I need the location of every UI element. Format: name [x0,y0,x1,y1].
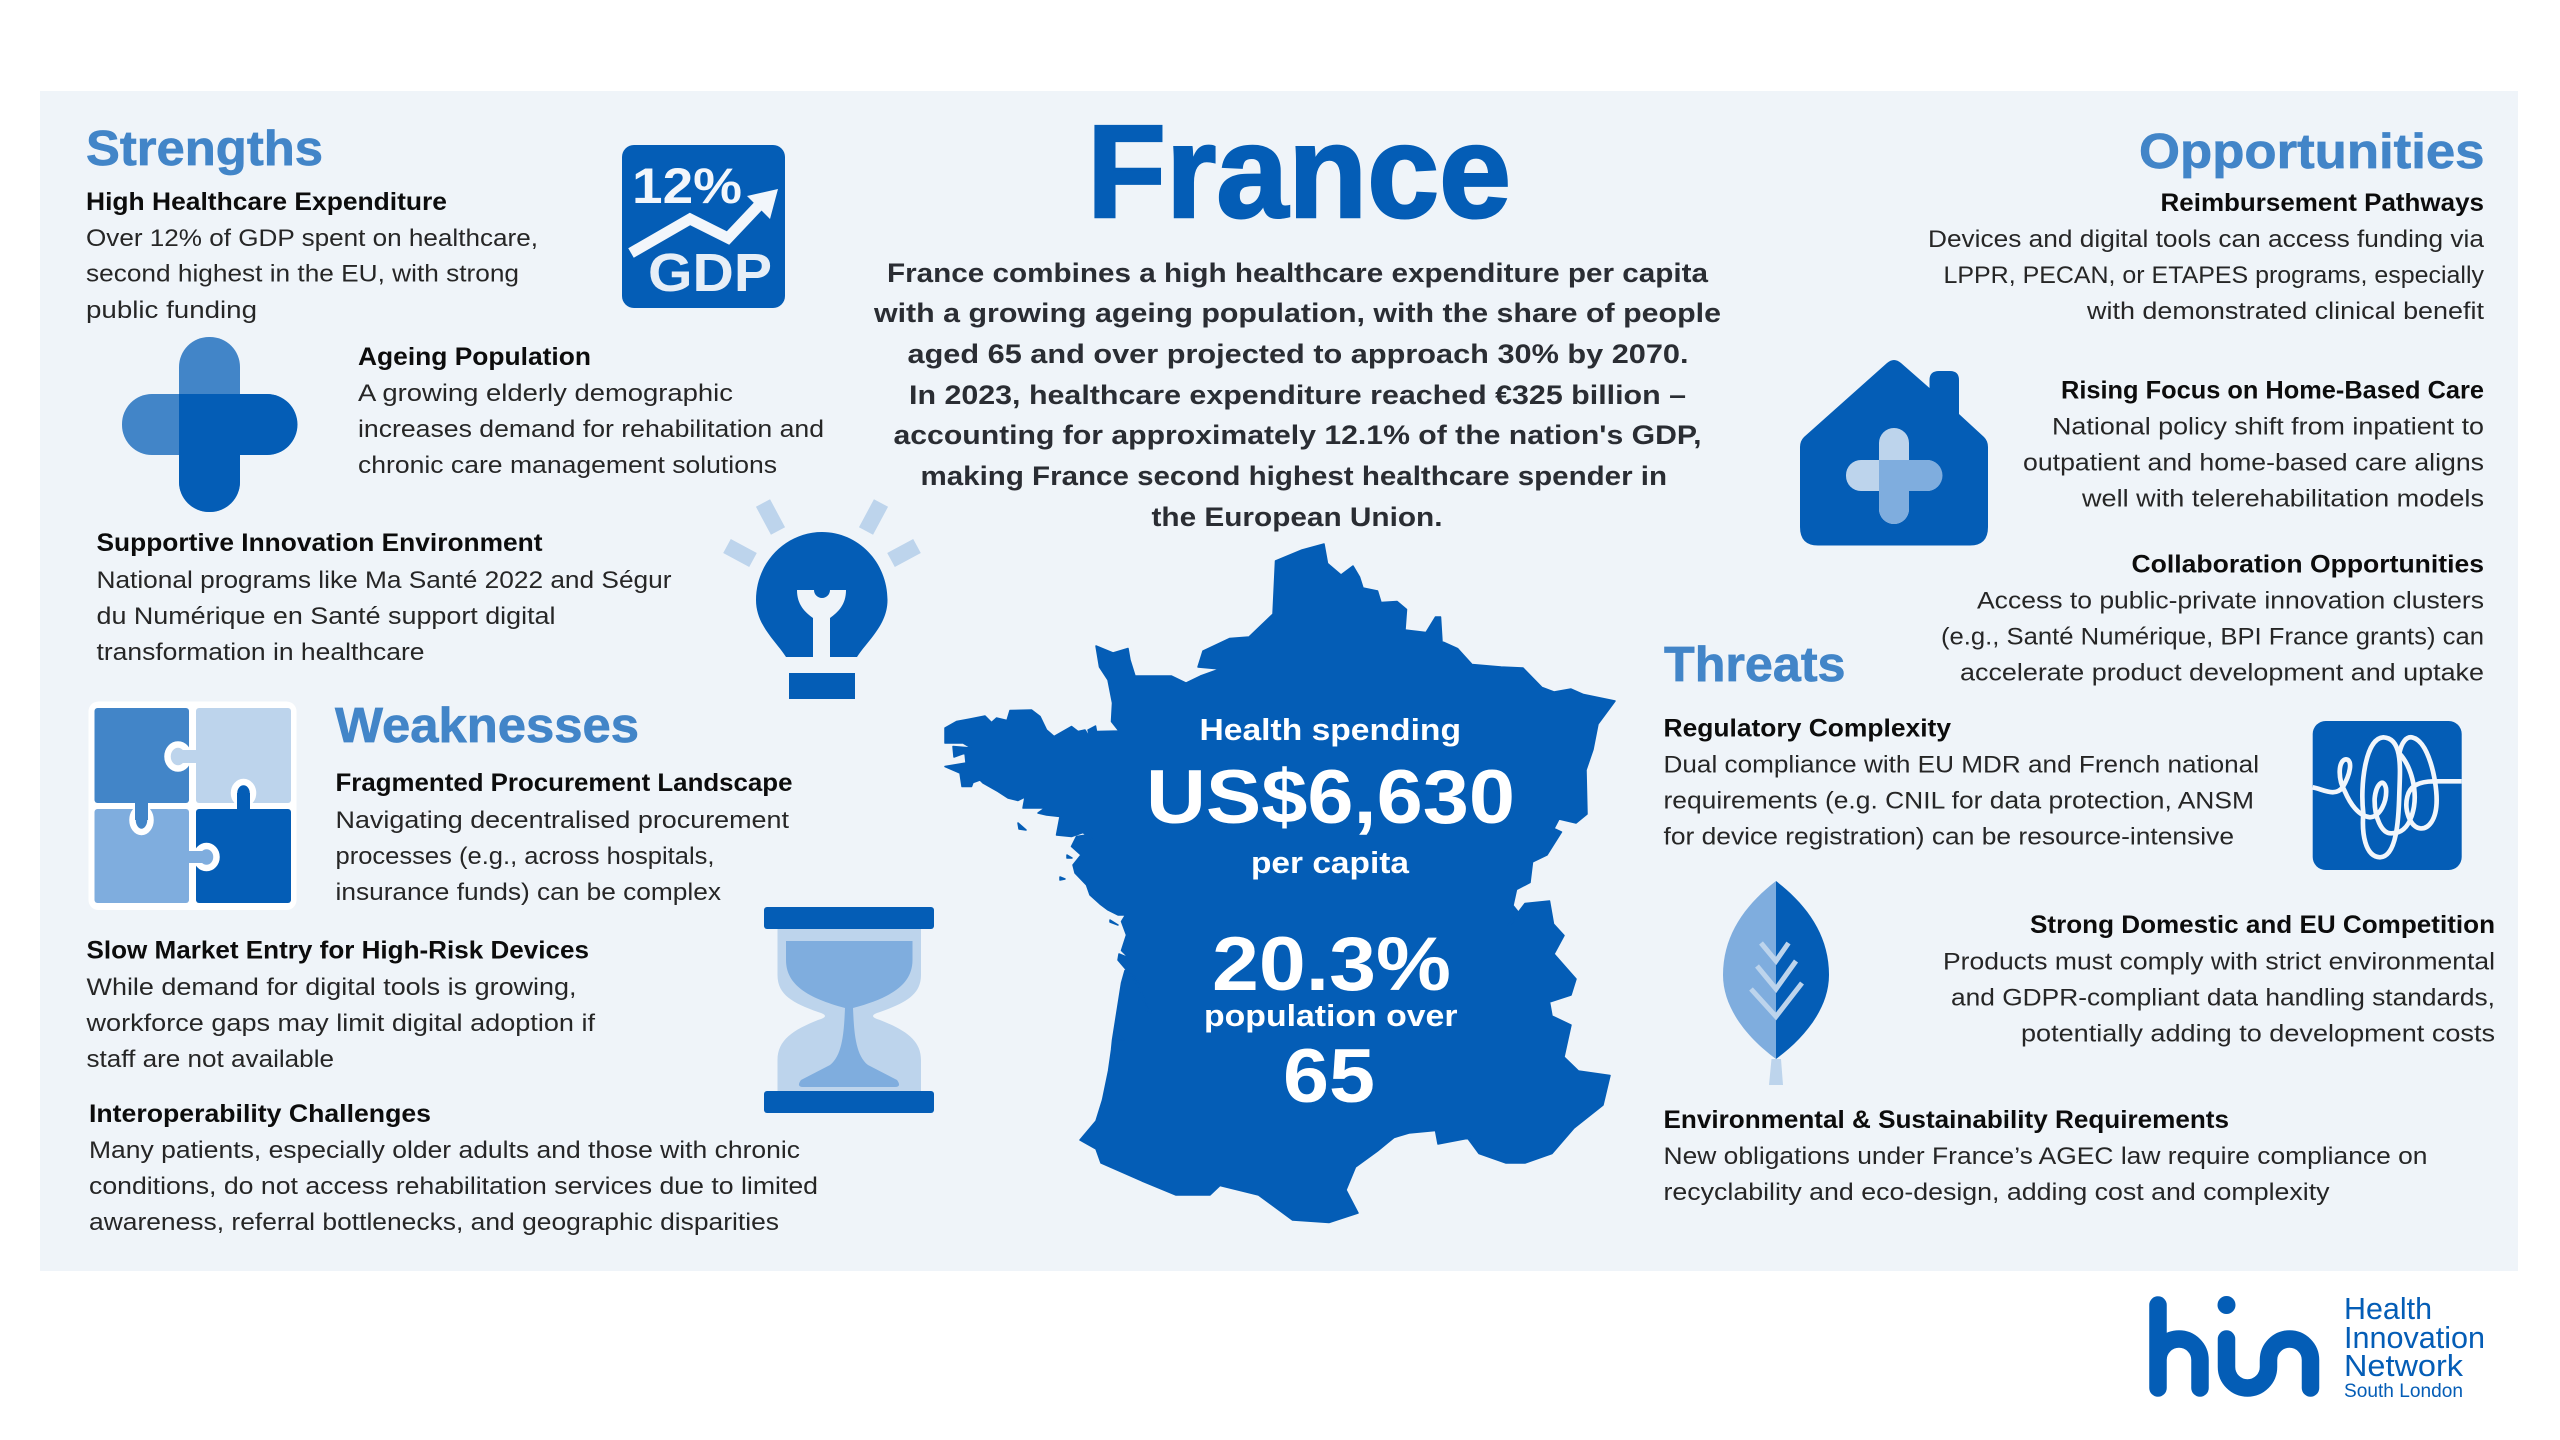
logo: Health Innovation Network South London [2158,1292,2485,1402]
text block: home-based care: outpatient and home-based care aligns [2023,450,2484,476]
text block: ageing population [358,343,824,479]
statistic: population over 65: 65 [1283,1034,1375,1119]
logo text: Health [2344,1292,2432,1326]
text block: ageing population: chronic care management solutions [358,452,777,479]
icon: light bulb [727,503,917,699]
text block: interoperability challenges: conditions, do not access rehabilitation services due to limited [89,1173,818,1200]
statistic: population over 65: 20.3% [1212,922,1451,1007]
logo text: South London [2344,1381,2463,1402]
map of France with statistics [945,544,1615,1222]
text block: ageing population: A growing elderly demographic [358,380,733,407]
text block: introduction: with a growing ageing population, with the share of people [873,298,1721,328]
text block: collaboration opportunities: (e.g., Santé Numérique, BPI France grants) can [1941,624,2484,650]
text block: competition: potentially adding to development costs [2021,1020,2495,1048]
statistic: health spending: US$6,630 [1146,755,1515,840]
text block: supportive innovation environment [96,529,672,666]
heading: opportunities: Opportunities [2139,125,2484,179]
text block: interoperability challenges: awareness, referral bottlenecks, and geographic disparities [89,1209,779,1236]
text block: regulatory complexity: Regulatory Complexity [1664,714,1951,742]
text block: home-based care: National policy shift from inpatient to [2052,414,2484,440]
statistic: health spending: Health spending [1200,712,1461,747]
text block: fragmented procurement landscape: insurance funds) can be complex [336,879,721,906]
logo text: Network [2344,1349,2464,1383]
panel: threats [1664,638,2495,1206]
text block: regulatory complexity [1664,714,2259,850]
icon: jigsaw puzzle [88,702,296,910]
map shape [945,544,1615,1222]
text block: collaboration opportunities: Collaboration Opportunities [2132,550,2484,578]
text block: high healthcare expenditure: High Healthcare Expenditure [86,188,447,216]
text block: home-based care [2023,376,2484,512]
logo text: Innovation [2344,1321,2485,1355]
background panel [40,91,2518,1271]
text block: reimbursement pathways: with demonstrated clinical benefit [2086,298,2484,325]
text block: reimbursement pathways: LPPR, PECAN, or ETAPES programs, especially [1944,262,2485,289]
text block: introduction: aged 65 and over projected to approach 30% by 2070. [908,339,1688,369]
text block: high healthcare expenditure: public funding [86,297,257,324]
statistic: health spending: per capita [1251,845,1410,880]
icon: leaf [1723,881,1829,1085]
text block: slow market entry [85,936,595,1073]
text block: reimbursement pathways: Devices and digital tools can access funding via [1928,226,2484,253]
text block: high healthcare expenditure: second highest in the EU, with strong [86,260,519,288]
text block: environmental requirements: New obligations under France’s AGEC law require compliance on [1664,1143,2428,1170]
text block: slow market entry: Slow Market Entry for High-Risk Devices [86,936,589,964]
text block: competition [1943,911,2495,1048]
text block: introduction [873,258,1721,532]
text block: regulatory complexity: requirements (e.g. CNIL for data protection, ANSM [1664,788,2254,814]
text block: supportive innovation environment: du Numérique en Santé support digital [96,603,556,630]
text block: supportive innovation environment: transformation in healthcare [96,639,424,666]
text block: slow market entry: workforce gaps may limit digital adoption if [85,1010,595,1037]
text block: fragmented procurement landscape: processes (e.g., across hospitals, [336,843,714,870]
text block: supportive innovation environment: Supportive Innovation Environment [96,529,543,557]
text block: reimbursement pathways [1928,189,2485,325]
icon: 12% GDP with rising arrow: GDP [648,243,772,303]
text block: ageing population: increases demand for rehabilitation and [358,416,824,443]
text block: interoperability challenges [89,1100,818,1236]
text block: interoperability challenges: Interoperability Challenges [89,1100,431,1128]
icon: medical cross [122,337,298,512]
panel: opportunities [1800,125,2485,686]
text block: interoperability challenges: Many patients, especially older adults and those with chronic [89,1137,800,1164]
statistic: population over 65: population over [1204,998,1458,1033]
text block: high healthcare expenditure: Over 12% of GDP spent on healthcare, [86,225,538,252]
text block: competition: Products must comply with strict environmental [1943,948,2495,976]
text block: introduction: accounting for approximately 12.1% of the nation's GDP, [894,420,1702,450]
text block: environmental requirements: Environmental & Sustainability Requirements [1664,1106,2229,1134]
icon: 12% GDP with rising arrow: 12% [632,158,742,214]
text block: introduction: the European Union. [1152,502,1442,532]
title: France [1087,98,1511,245]
text block: environmental requirements: recyclability and eco-design, adding cost and complexity [1664,1179,2330,1206]
text block: fragmented procurement landscape: Navigating decentralised procurement [336,807,789,834]
icon: house with medical cross [1800,360,1988,546]
text block: collaboration opportunities: Access to public-private innovation clusters [1977,588,2484,614]
text block: introduction: In 2023, healthcare expenditure reached €325 billion – [909,380,1686,410]
text block: regulatory complexity: Dual compliance with EU MDR and French national [1664,752,2259,778]
text block: high healthcare expenditure [86,188,538,324]
logo mark [2158,1296,2310,1388]
text block: supportive innovation environment: National programs like Ma Santé 2022 and Ségur [96,567,672,594]
text block: home-based care: well with telerehabilitation models [2081,486,2484,512]
text block: ageing population: Ageing Population [358,343,591,371]
text block: home-based care: Rising Focus on Home-Based Care [2061,376,2484,404]
text block: competition: Strong Domestic and EU Competition [2030,911,2495,939]
logo text [2344,1292,2485,1402]
text block: fragmented procurement landscape: Fragmented Procurement Landscape [336,769,793,797]
heading: weaknesses: Weaknesses [335,699,639,753]
text block: slow market entry: While demand for digital tools is growing, [86,974,576,1001]
text block: slow market entry: staff are not available [86,1046,334,1073]
text block: introduction: France combines a high healthcare expenditure per capita [887,258,1708,288]
icon: tangled line [2313,721,2462,870]
text block: competition: and GDPR-compliant data handling standards, [1951,984,2495,1012]
icon: 12% GDP with rising arrow [622,145,785,308]
text block: collaboration opportunities: accelerate product development and uptake [1960,660,2484,686]
icon: hourglass [764,907,934,1113]
text block: reimbursement pathways: Reimbursement Pathways [2160,189,2484,217]
text block: collaboration opportunities [1941,550,2484,686]
text block: regulatory complexity: for device registration) can be resource-intensive [1664,824,2234,850]
text block: introduction: making France second highest healthcare spender in [920,461,1667,491]
heading: threats: Threats [1664,638,1846,692]
statistic: population over 65 [1204,922,1458,1119]
panel: weaknesses [85,699,934,1236]
panel: strengths [86,122,917,699]
statistic: health spending [1146,712,1515,880]
heading: strengths: Strengths [86,122,323,176]
text block: environmental requirements [1664,1106,2428,1206]
text block: fragmented procurement landscape [336,769,793,906]
